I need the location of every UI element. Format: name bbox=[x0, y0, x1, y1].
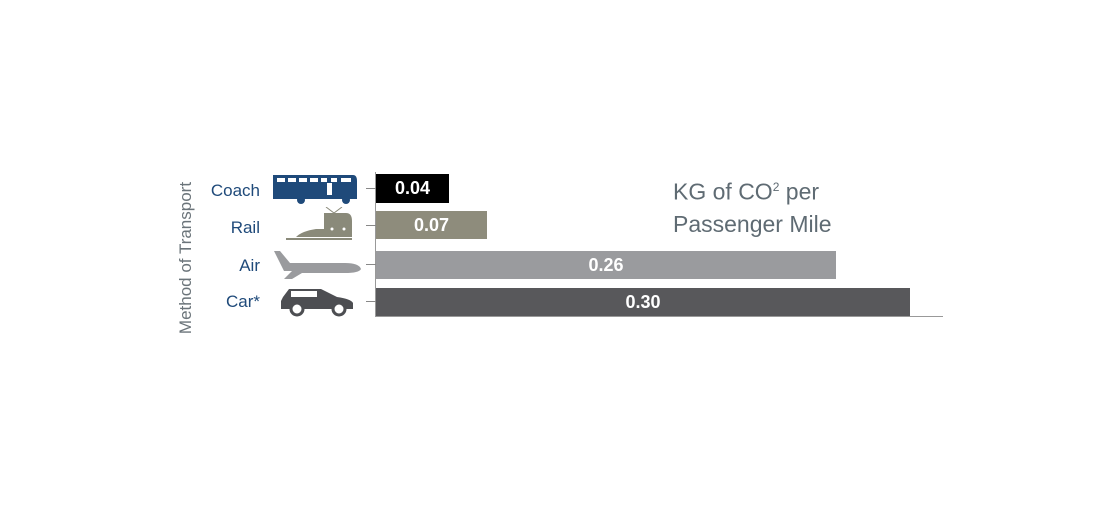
axis title: Method of Transport bbox=[176, 182, 195, 334]
y axis bbox=[375, 172, 376, 317]
label: Coach: Coach bbox=[211, 181, 260, 200]
chart title: KG of CO2 per bbox=[673, 179, 819, 205]
bar: air: 0.26 bbox=[588, 254, 624, 274]
chart title bbox=[673, 179, 832, 237]
bar: rail: 0.07 bbox=[414, 214, 449, 234]
bar: rail bbox=[376, 211, 487, 239]
icon: car bbox=[281, 289, 353, 316]
x axis bbox=[375, 316, 943, 317]
icon: rail bbox=[286, 207, 352, 240]
bar: coach bbox=[376, 174, 449, 203]
chart title: Passenger Mile bbox=[673, 211, 832, 237]
label: Car: Car* bbox=[226, 292, 260, 311]
bar: car: 0.30 bbox=[625, 292, 661, 312]
bar: coach: 0.04 bbox=[395, 178, 430, 198]
icon: plane bbox=[274, 251, 361, 279]
label: Rail: Rail bbox=[231, 218, 260, 237]
bar: car bbox=[376, 288, 910, 316]
bar: air bbox=[376, 251, 836, 279]
icon: coach bbox=[273, 175, 357, 204]
label: Air: Air bbox=[239, 256, 260, 275]
